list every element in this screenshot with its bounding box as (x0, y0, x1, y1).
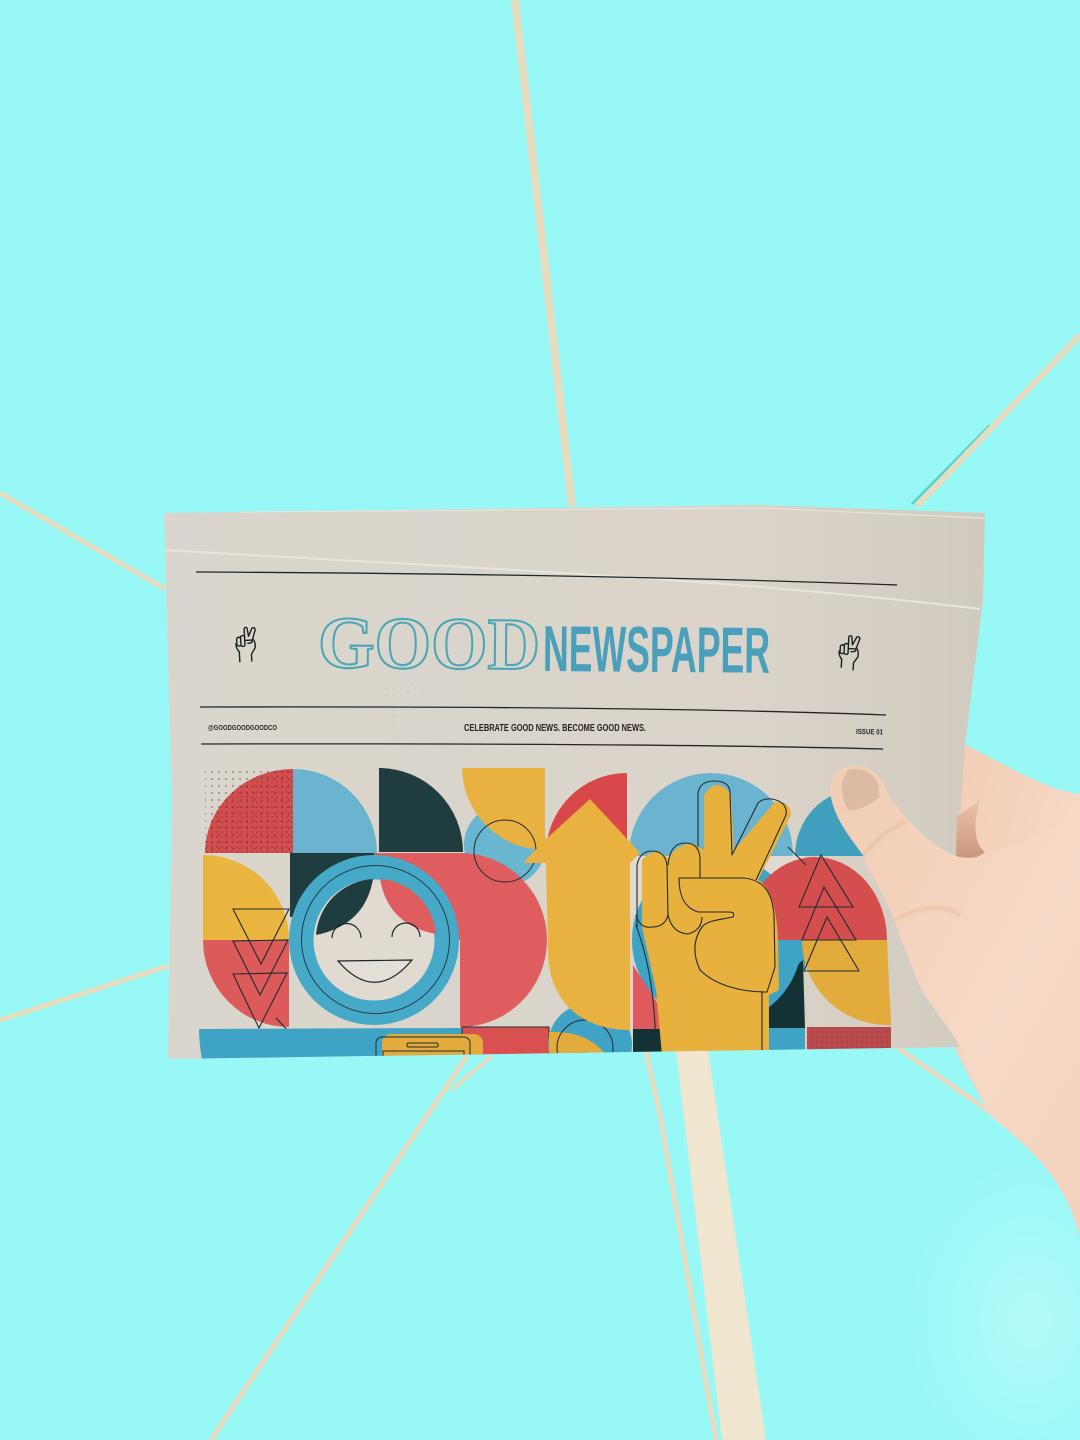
title: GOOD outlined letters: GOOD (318, 602, 540, 686)
masthead strip: slogan: CELEBRATE GOOD NEWS. BECOME GOOD NEWS. (464, 722, 646, 734)
masthead strip rules (200, 707, 886, 749)
art: bottom circle with yellow half (548, 1008, 632, 1054)
masthead strip: issue: ISSUE 01 (856, 727, 883, 736)
faint halftone on paper (382, 684, 422, 724)
art: upright triangles (788, 847, 859, 971)
art: yellow peace hand (636, 781, 791, 1055)
title: NEWSPAPER: NEWSPAPER (543, 612, 770, 687)
art: big red half circle (374, 853, 547, 1027)
art: bottom blue band (199, 1028, 462, 1058)
paper sheet (164, 505, 985, 1059)
masthead top rule (196, 572, 897, 585)
cover artwork: geometric composition (199, 768, 891, 1087)
thumbnail (842, 769, 880, 810)
newspaper (164, 505, 985, 1087)
art: right red half circle (762, 857, 887, 940)
peace hand icon left (235, 627, 257, 662)
art: thin circle outline (474, 820, 536, 882)
peace hand icon right (838, 635, 860, 670)
paper crease (165, 550, 980, 609)
hand gap shadow (956, 800, 985, 859)
sunlight haze on canopy (900, 1150, 1080, 1440)
art: top right blue shape (795, 796, 864, 856)
art: blue circles behind hand (629, 773, 805, 1053)
hand behind paper (950, 745, 1080, 1235)
masthead title (318, 602, 770, 688)
art: top left shapes (205, 768, 546, 917)
folded top edge (240, 508, 984, 518)
art: smiling face in magnifier (302, 866, 450, 1014)
thumb and palm in front of paper (830, 766, 1080, 1235)
art: red quarter behind arrow (548, 773, 627, 839)
art: right red bar (807, 1027, 891, 1051)
art: bottom red rectangle (462, 1026, 550, 1055)
palm crease (863, 822, 960, 920)
masthead strip: handle: @GOODGOODGOODCO (208, 723, 277, 732)
art: yellow phone (376, 1034, 483, 1056)
art: left yellow and red quarter shapes (203, 855, 289, 1027)
art: yellow arrow (523, 799, 640, 1030)
art: inverted triangles (232, 908, 290, 1029)
art: right yellow quarter (802, 940, 891, 1025)
